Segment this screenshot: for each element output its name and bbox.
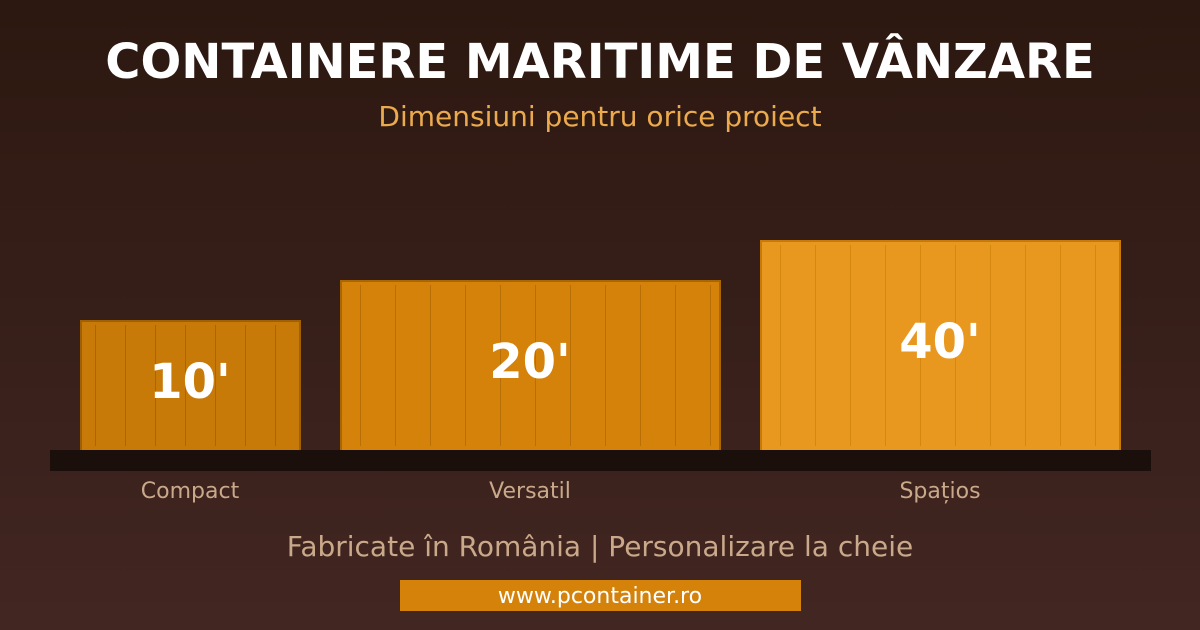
label: 20 ft: 20' [489,334,571,390]
label: 10 ft: 10' [149,354,231,410]
label: 40 ft: 40' [899,314,981,370]
caption: Spațios: Spațios [899,479,981,504]
subtitle: Dimensiuni pentru orice proiect [378,100,822,133]
container: 20 ft [341,281,720,451]
title: CONTAINERE MARITIME DE VÂNZARE [105,34,1095,90]
caption: Versatil: Versatil [489,479,571,504]
container: 10 ft [81,321,300,451]
tagline: Fabricate în România | Personalizare la cheie [287,530,913,563]
website badge background [400,580,801,611]
ground bar [50,450,1151,471]
website: www.pcontainer.ro [498,584,702,609]
caption: Compact: Compact [141,479,239,504]
container: 40 ft [761,241,1120,451]
